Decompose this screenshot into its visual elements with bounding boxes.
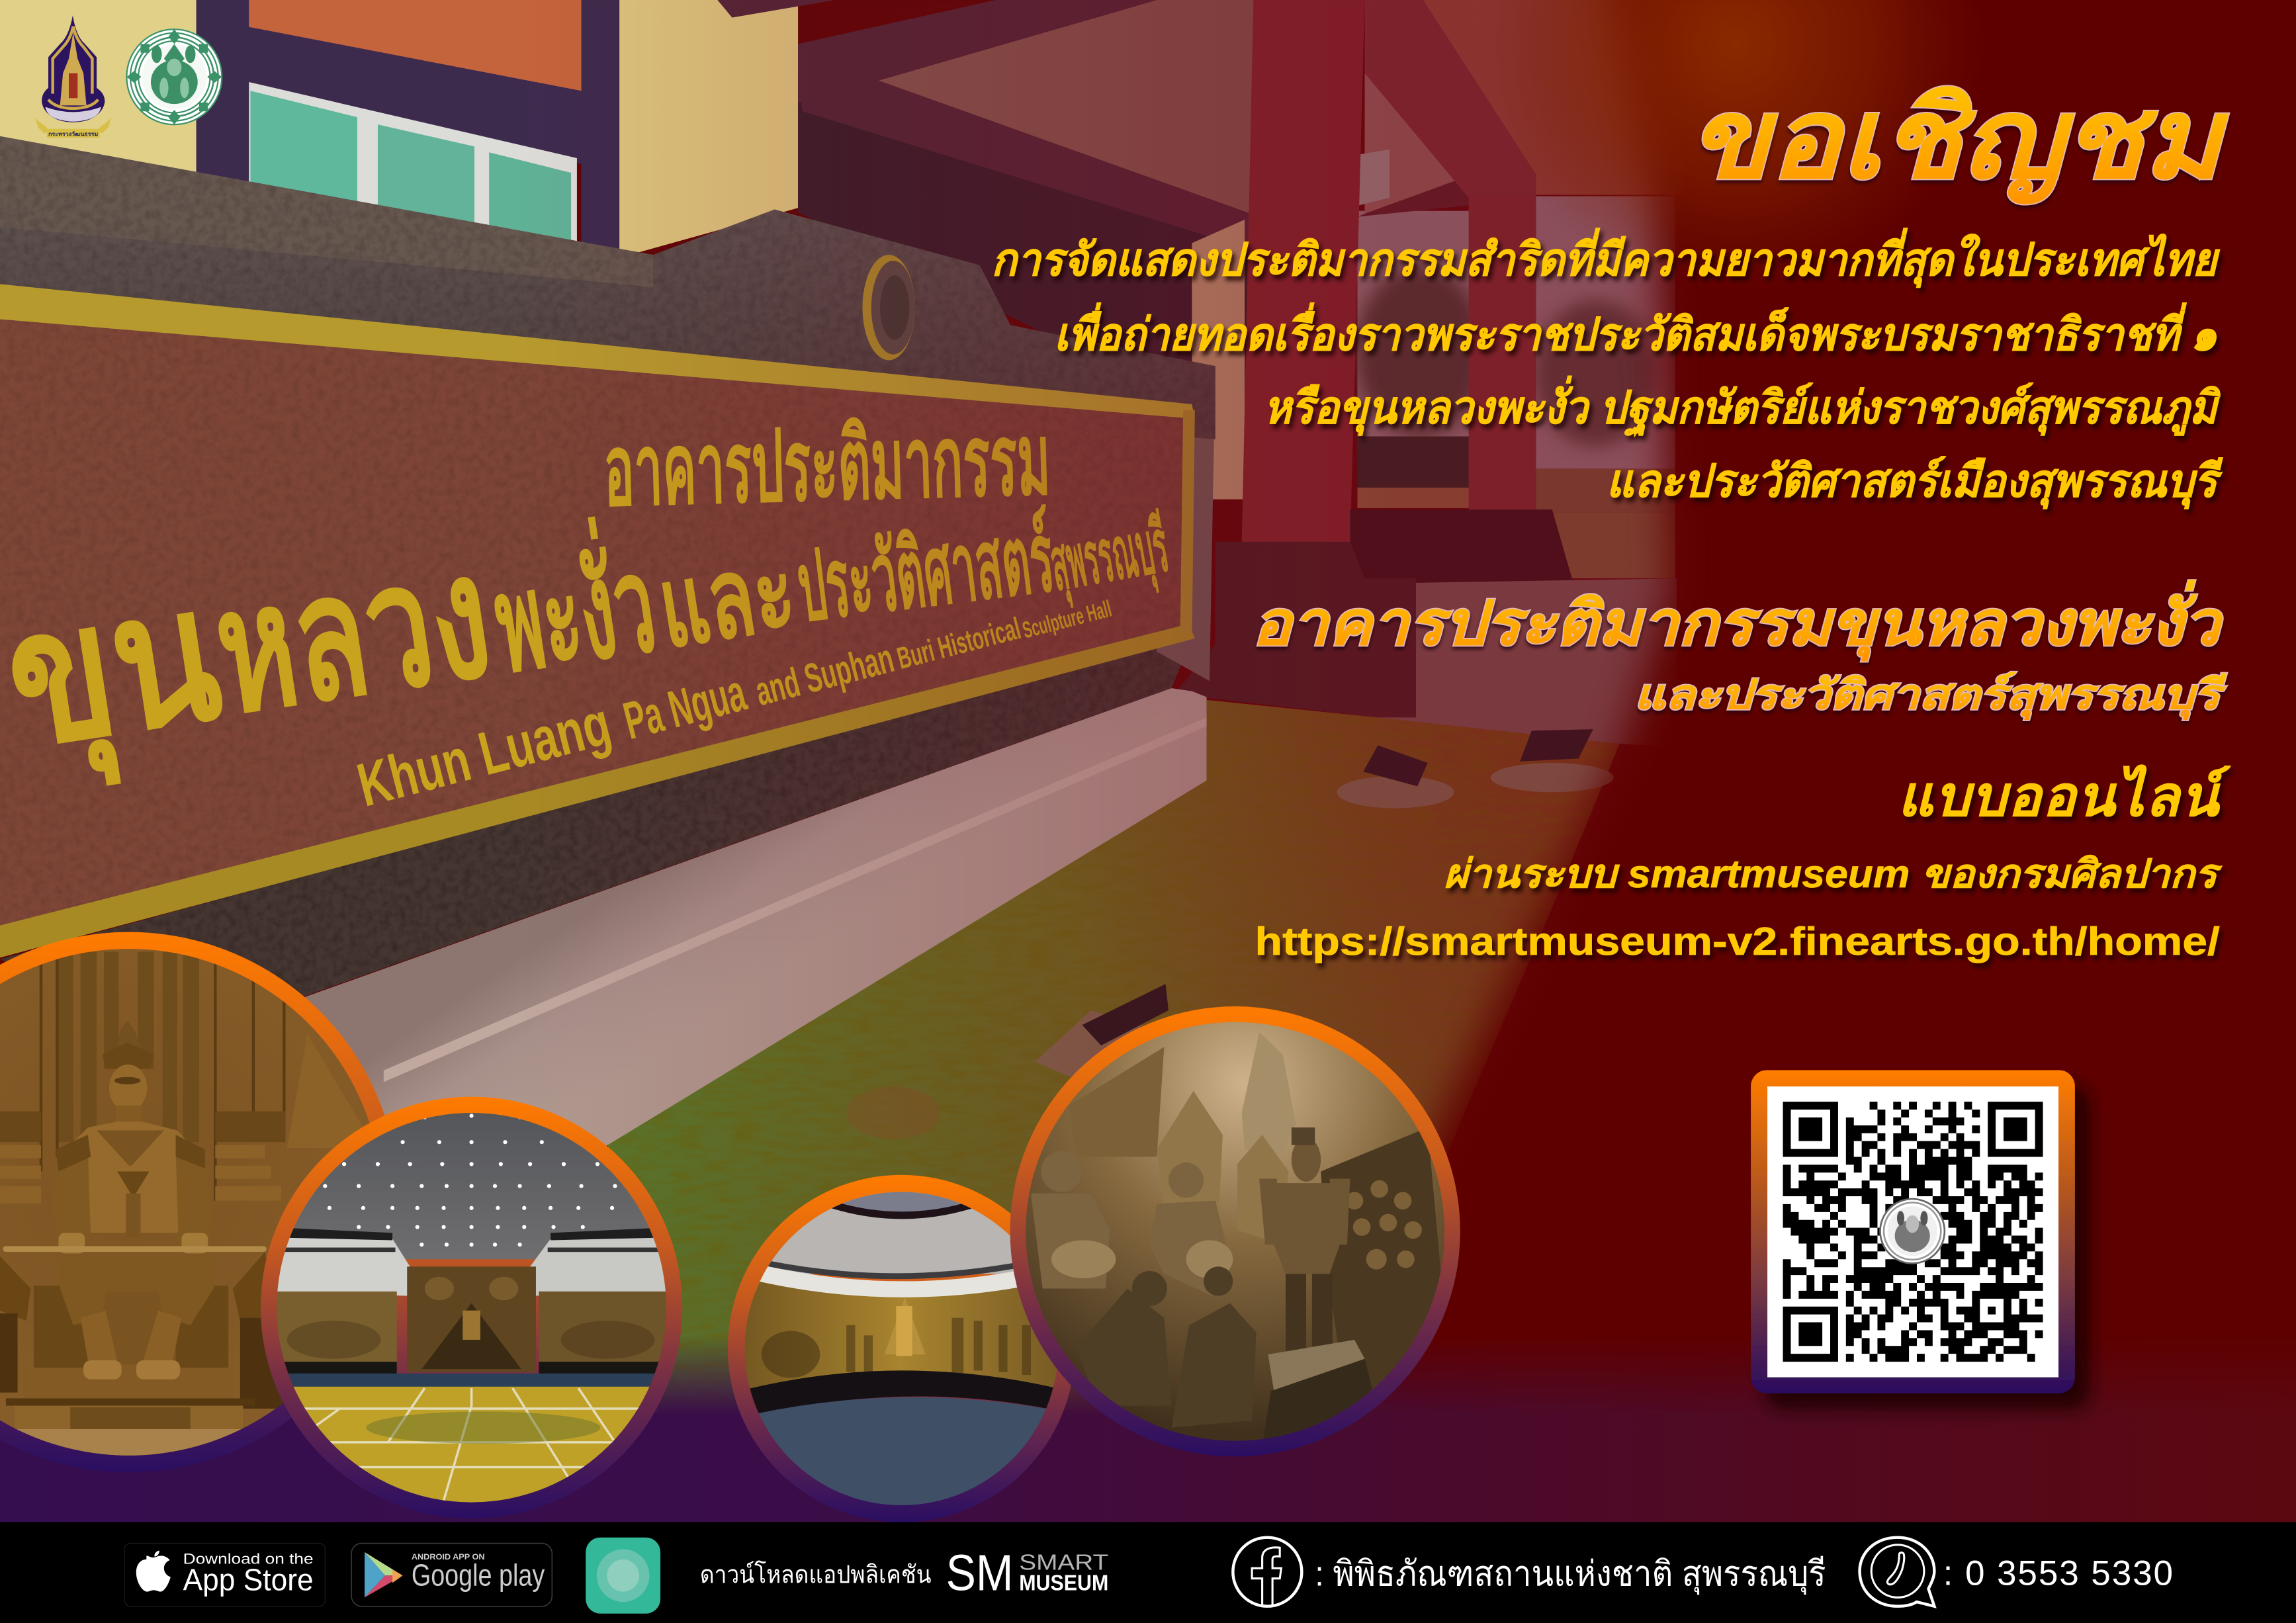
crest logo: Ministry of Culture bbox=[35, 15, 111, 138]
seal logo: Fine Arts Department bbox=[126, 29, 222, 124]
heading: museum building name: และประวัติศาสตร์สุพรรณบุรี bbox=[1634, 672, 2227, 721]
lower stone bbox=[0, 633, 1195, 1025]
description text block: และประวัติศาสตร์เมืองสุพรรณบุรี bbox=[1607, 455, 2223, 509]
sign lettering on building: ประวัติศาสตร์ bbox=[792, 503, 1059, 641]
Google Play badge: ANDROID APP ON bbox=[412, 1552, 485, 1561]
paving bbox=[1376, 578, 1677, 747]
sign lettering on building: ขุน bbox=[0, 548, 235, 799]
icon: apple bbox=[136, 1551, 171, 1592]
access info and URL: https://smartmuseum-v2.finearts.go.th/home/ bbox=[1255, 919, 2220, 963]
sign lettering on building: Khun Luang bbox=[351, 689, 617, 820]
icon: phone bubble bbox=[1860, 1538, 1934, 1606]
icon: facebook bbox=[1233, 1538, 1302, 1606]
QR code card bbox=[1751, 1070, 2075, 1393]
sign lettering on building: อาคารประติมากรรม bbox=[602, 404, 1052, 527]
sign lettering on building: หลวง bbox=[204, 519, 502, 750]
throne bbox=[0, 1286, 366, 1473]
Smart Museum logo: SM bbox=[946, 1544, 1013, 1601]
sign lettering on building: and Suphan bbox=[751, 635, 899, 715]
sign lettering on building: และ bbox=[650, 527, 803, 671]
grass texture bbox=[607, 700, 1620, 1464]
heading: invitation: ขอเชิญชม bbox=[1689, 77, 2229, 204]
icon: play triangle bbox=[365, 1552, 403, 1597]
text: สุพรรณบุรี bbox=[1044, 505, 1174, 610]
steps bbox=[1350, 509, 1574, 615]
sign lettering on building: Sculpture Hall bbox=[1020, 595, 1114, 644]
photo circle: king statue bbox=[0, 932, 399, 1473]
heading: museum building name: อาคารประติมากรรมขุนหลวงพะงั่ว bbox=[1252, 580, 2224, 662]
statue figure bbox=[3, 1021, 267, 1380]
App Store badge bbox=[124, 1544, 325, 1606]
panel grooves bbox=[40, 952, 286, 1201]
photo circle: bronze relief of king and people bbox=[1010, 1006, 1460, 1464]
description text block: การจัดแสดงประติมากรรมสำริดที่มีความยาวมากที่สุดในประเทศไทย bbox=[991, 228, 2221, 288]
main column bbox=[1242, 0, 1365, 545]
sign lettering on building bbox=[0, 404, 1174, 820]
heading: museum building name bbox=[1252, 580, 2227, 721]
App Store badge: App Store bbox=[183, 1562, 314, 1597]
right cream wall bbox=[619, 0, 798, 258]
Facebook page name: : พิพิธภัณฑสถานแห่งชาติ สุพรรณบุรี bbox=[1315, 1555, 1826, 1595]
Smart Museum logo bbox=[946, 1544, 1108, 1601]
grass bbox=[607, 700, 1620, 1464]
beam under right ceiling bbox=[1357, 174, 1536, 217]
description text block: หรือขุนหลวงพะงั่ว ปฐมกษัตริย์แห่งราชวงศ์สุพรรณภูมิ bbox=[1264, 376, 2221, 437]
sign face bbox=[0, 310, 1195, 937]
floodlight pads bbox=[1036, 763, 1614, 1076]
window frame bbox=[197, 0, 619, 252]
lattice stripes bbox=[59, 952, 199, 1142]
bare patch bbox=[846, 1086, 940, 1139]
Google Play badge: Google play bbox=[412, 1558, 545, 1593]
phone number: : 0 3553 5330 bbox=[1943, 1554, 2173, 1593]
Google Play badge bbox=[351, 1544, 552, 1606]
background windows with trees bbox=[1356, 197, 1675, 578]
access info and URL: ผ่านระบบ smartmuseum ของกรมศิลปากร bbox=[1444, 852, 2223, 896]
speaker box bbox=[1354, 150, 1390, 206]
QR modules bbox=[1783, 1102, 2043, 1362]
sign lettering on building: พะงั่ว bbox=[483, 509, 664, 701]
sail relief bbox=[287, 1037, 349, 1148]
left cream wall bbox=[0, 0, 199, 173]
gold top strip bbox=[0, 284, 1195, 419]
sign end block bbox=[1157, 359, 1215, 681]
column base block bbox=[1174, 542, 1416, 717]
description text block: เพื่อถ่ายทอดเรื่องราวพระราชประวัติสมเด็จพระบรมราชาธิราชที่ ๑ bbox=[1054, 302, 2217, 360]
photo circle: curved relief gallery bbox=[728, 1175, 1075, 1523]
gold bottom strip bbox=[0, 624, 1195, 957]
porch dark wall bbox=[798, 88, 1259, 439]
right ceiling bbox=[1365, 0, 1684, 195]
side panels and slats bbox=[0, 1112, 286, 1142]
white plinth bbox=[300, 688, 1207, 1259]
porch ceiling bbox=[879, 0, 1259, 217]
footer bar bbox=[0, 1522, 2296, 1623]
description text block bbox=[991, 228, 2223, 509]
access info and URL bbox=[1255, 852, 2223, 963]
seal figure bbox=[151, 44, 198, 104]
kneeling and offering figures bbox=[1031, 1151, 1230, 1296]
ribbon with ministry name bbox=[35, 117, 111, 138]
teal window bbox=[249, 82, 577, 243]
QR centre seal bbox=[1880, 1199, 1945, 1263]
sign lettering on building: Pa Ngua bbox=[618, 662, 752, 750]
photo circle: exhibition hall with map floor bbox=[261, 1097, 688, 1526]
download label: ดาวน์โหลดแอปพลิเคชัน bbox=[700, 1560, 931, 1588]
sign medallion bbox=[862, 255, 915, 360]
porch beams bbox=[717, 0, 1259, 252]
Smart Museum logo: MUSEUM bbox=[1019, 1571, 1108, 1595]
floodlights bbox=[1082, 729, 1593, 1045]
Smart Museum app icon bbox=[586, 1538, 660, 1614]
diagonal beam bbox=[1365, 0, 1536, 198]
sign lettering on building: Buri Historical bbox=[893, 611, 1024, 676]
second column bbox=[1469, 195, 1536, 511]
standing figure bbox=[1259, 1127, 1350, 1274]
Smart Museum logo: SMART bbox=[1019, 1550, 1108, 1575]
cream pier behind column bbox=[1192, 220, 1245, 500]
online label: แบบออนไลน์ bbox=[1898, 765, 2231, 828]
stone cap bbox=[0, 136, 1215, 439]
ribbon with ministry name: กระทรวงวัฒนธรรม bbox=[48, 130, 98, 137]
orange upper panel bbox=[246, 0, 582, 120]
side cloth and steps bbox=[0, 1252, 266, 1321]
App Store badge: Download on the bbox=[183, 1551, 314, 1567]
